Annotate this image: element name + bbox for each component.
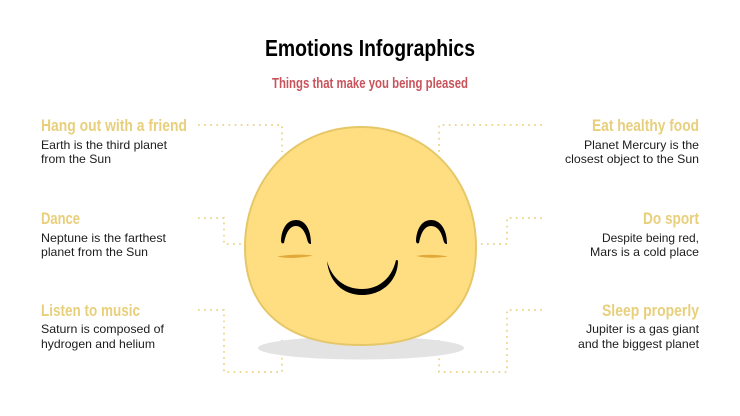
right item: sleep — [578, 301, 700, 351]
left item: hang out: from the Sun — [41, 152, 111, 166]
right item: sleep: Sleep properly — [602, 301, 699, 320]
right item: healthy food: Planet Mercury is the — [584, 138, 699, 152]
right item: sport: Despite being red, — [602, 231, 699, 245]
face — [245, 127, 476, 345]
left item: dance — [41, 209, 167, 259]
dotted connectors — [198, 125, 542, 372]
right cheek — [416, 255, 448, 258]
right item: sport: Mars is a cold place — [590, 245, 699, 259]
right item: healthy food: Eat healthy food — [592, 116, 699, 135]
right eye — [416, 220, 447, 244]
right item: healthy food — [565, 116, 699, 166]
face shadow — [258, 336, 464, 360]
right item: sport: Do sport — [643, 209, 699, 228]
left item: dance: Dance — [41, 209, 80, 228]
right item: healthy food: closest object to the Sun — [565, 152, 699, 166]
left item: music: hydrogen and helium — [41, 337, 155, 351]
right item: sleep: Jupiter is a gas giant — [586, 322, 700, 336]
left item: hang out — [41, 116, 187, 166]
left item: dance: Neptune is the farthest — [41, 231, 167, 245]
left item: music: Saturn is composed of — [41, 322, 165, 336]
left item: hang out: Earth is the third planet — [41, 138, 168, 152]
title: Emotions Infographics — [265, 35, 475, 61]
left item: music: Listen to music — [41, 301, 140, 320]
left item: music — [41, 301, 165, 351]
left item: dance: planet from the Sun — [41, 245, 148, 259]
right item: sleep: and the biggest planet — [578, 337, 700, 351]
left cheek — [277, 255, 313, 258]
mouth — [327, 260, 398, 295]
left item: hang out: Hang out with a friend — [41, 116, 187, 135]
right item: sport — [590, 209, 699, 259]
icon: smiling face — [245, 127, 476, 360]
left eye — [281, 220, 311, 244]
subtitle: Things that make you being pleased — [272, 75, 468, 92]
